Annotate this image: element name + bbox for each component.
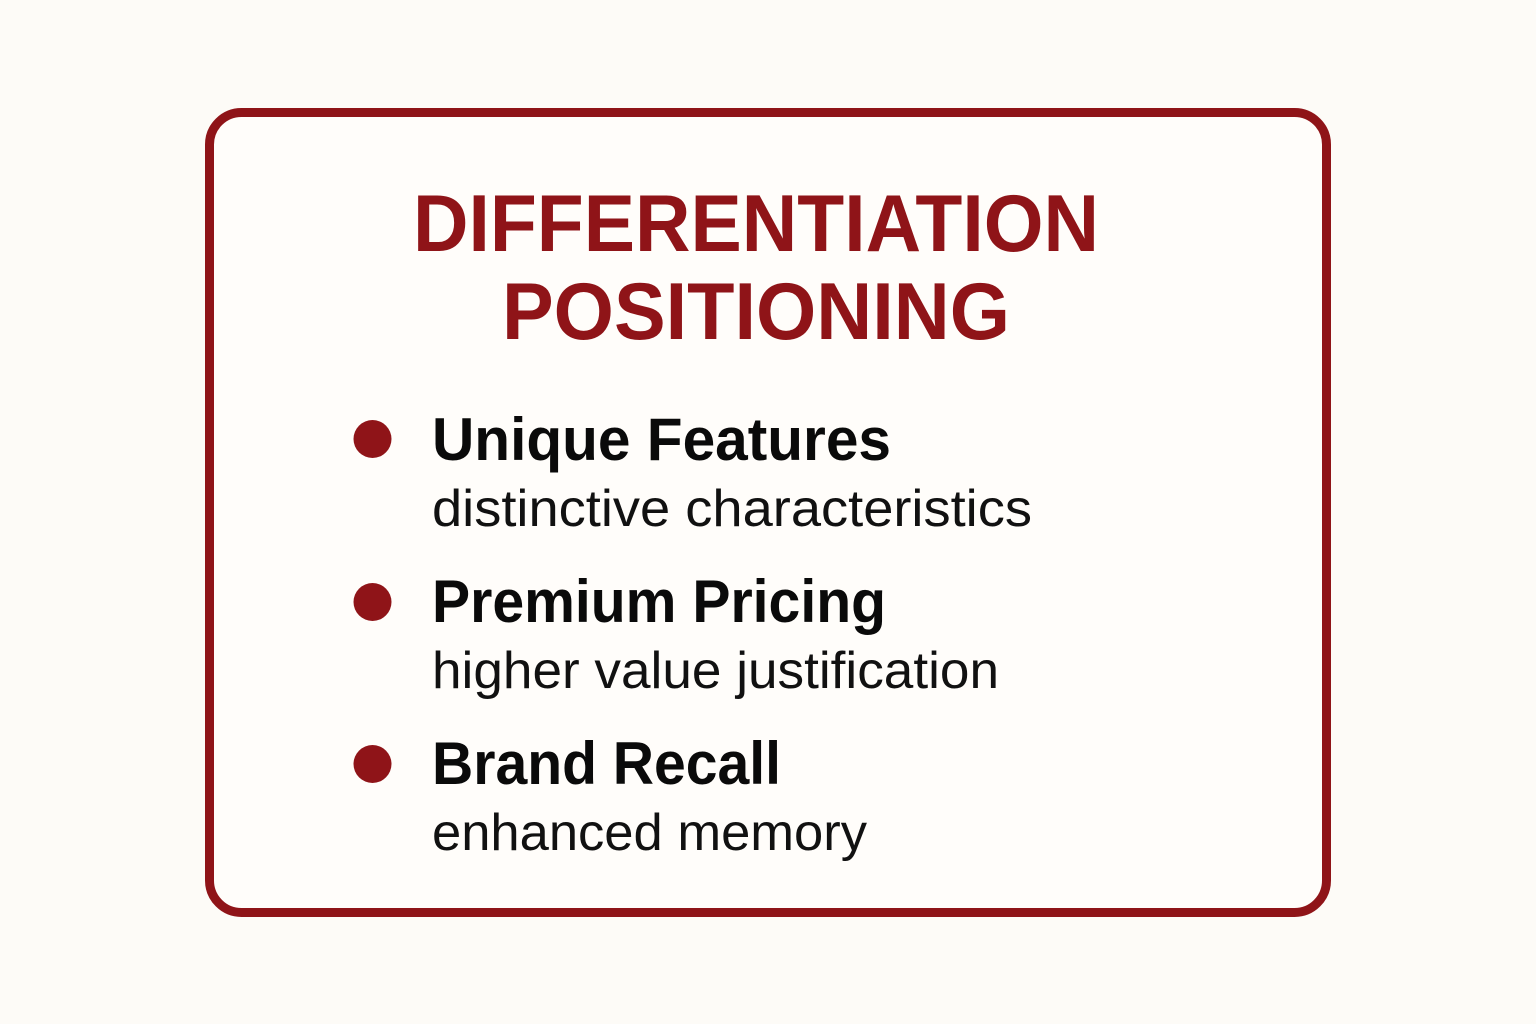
list item: premium pricing: Premium Pricing xyxy=(432,568,886,635)
list item: brand recall xyxy=(354,730,867,862)
title: POSITIONING xyxy=(502,267,1010,357)
list item: unique features xyxy=(354,406,1032,538)
list item: brand recall: enhanced memory xyxy=(432,804,867,862)
list item: premium pricing xyxy=(354,568,999,700)
list item: premium pricing: higher value justification xyxy=(432,642,999,700)
title xyxy=(413,179,1099,357)
list item: unique features: distinctive characteristics xyxy=(432,480,1032,538)
list item: brand recall: Brand Recall xyxy=(432,730,781,797)
title: DIFFERENTIATION xyxy=(413,179,1099,269)
panel: differentiation positioning card xyxy=(210,112,1326,912)
list item: unique features: Unique Features xyxy=(432,406,891,473)
